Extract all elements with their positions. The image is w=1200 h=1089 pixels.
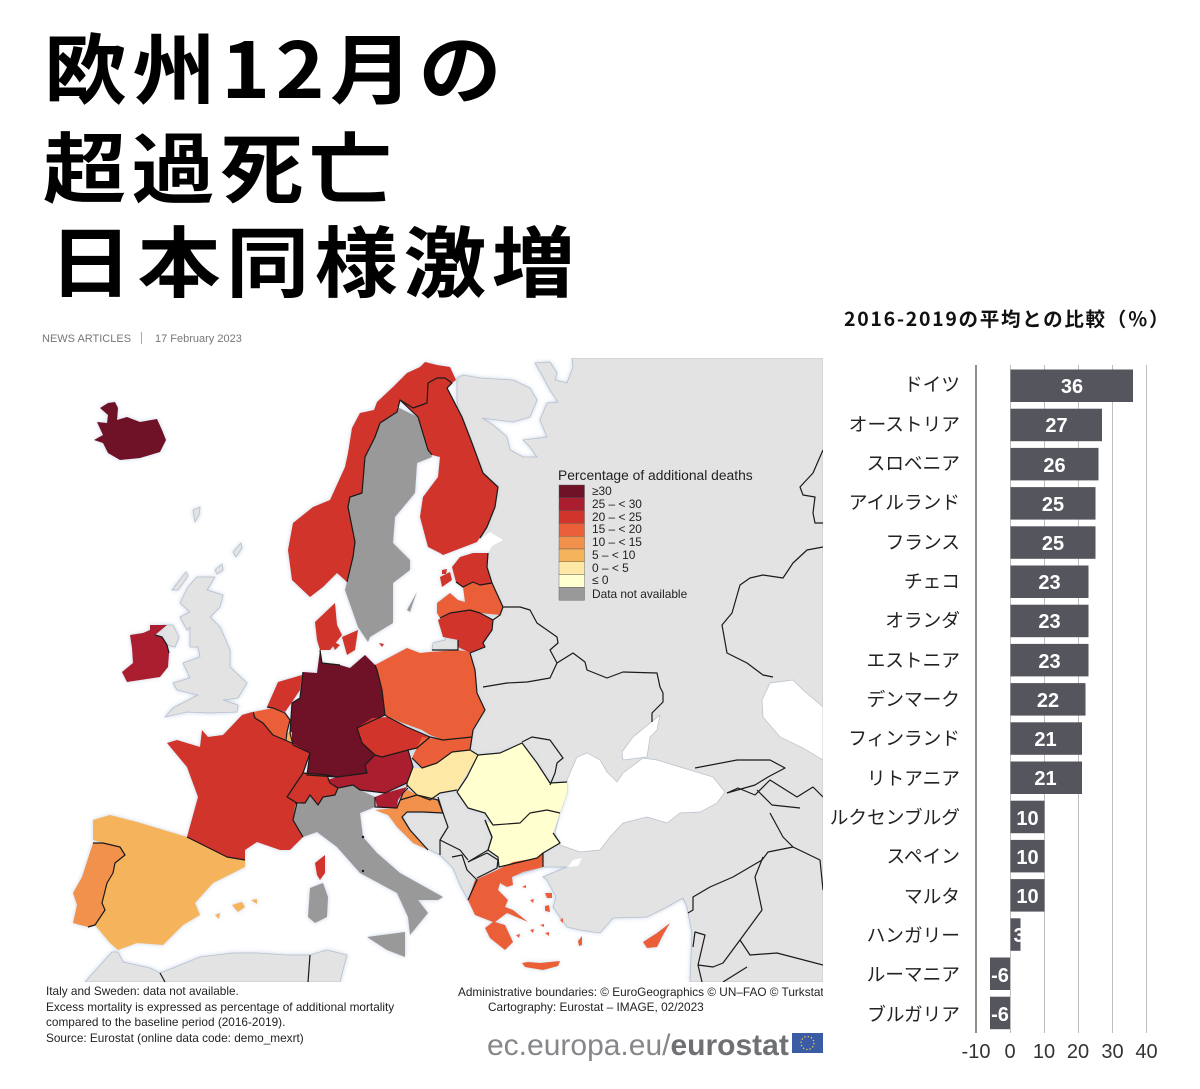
Balearic Islands xyxy=(215,899,257,919)
country labels: スロベニア xyxy=(867,449,960,476)
bar chart heading: 2016-2019の平均との比較（％） xyxy=(844,303,1170,332)
axis tick labels: 40 xyxy=(1135,1041,1158,1063)
country labels: オーストリア xyxy=(849,410,960,437)
Estonia xyxy=(440,553,492,587)
Gotland xyxy=(407,592,417,612)
map legend: ≥30 xyxy=(592,484,612,498)
map credits: Administrative boundaries: © EuroGeographics © UN–FAO © Turkstat xyxy=(458,985,824,999)
bar values: 10 xyxy=(1016,886,1039,908)
map legend: 15 – < 20 xyxy=(592,522,642,536)
Sweden xyxy=(345,407,432,642)
bar values: 23 xyxy=(1038,651,1061,673)
Sea of Azov xyxy=(622,715,660,760)
country labels: ハンガリー xyxy=(867,921,960,948)
bar values: 27 xyxy=(1045,415,1068,437)
France xyxy=(167,712,310,860)
Iceland xyxy=(94,402,166,460)
title: 欧州12月の xyxy=(44,10,507,121)
map: excess mortality in Europe xyxy=(73,358,823,982)
Germany xyxy=(290,650,385,777)
bar values: 10 xyxy=(1016,847,1039,869)
country labels: アイルランド xyxy=(849,488,960,515)
bar values: 26 xyxy=(1043,455,1066,477)
axis tick labels: 20 xyxy=(1067,1041,1089,1063)
country labels: マルタ xyxy=(904,882,960,909)
Finland xyxy=(400,378,498,555)
source notes: Italy and Sweden: data not available. xyxy=(46,984,239,998)
Poland xyxy=(375,648,485,740)
title: 超過死亡 xyxy=(43,109,397,220)
country labels: フランス xyxy=(886,528,960,555)
country labels: デンマーク xyxy=(867,685,960,712)
map credits: Cartography: Eurostat – IMAGE, 02/2023 xyxy=(488,1000,704,1014)
Lithuania xyxy=(438,610,493,653)
small gray islands xyxy=(172,507,242,590)
map legend: 0 – < 5 xyxy=(592,561,629,575)
map legend: 25 – < 30 xyxy=(592,497,642,511)
map legend xyxy=(558,467,753,601)
Croatia xyxy=(375,790,443,850)
Hungary xyxy=(407,750,478,800)
Northern Ireland xyxy=(155,625,179,647)
Netherlands xyxy=(267,675,302,712)
Ireland xyxy=(122,625,169,682)
Black Sea xyxy=(555,753,725,852)
Greece xyxy=(468,853,582,970)
axis tick labels: -10 xyxy=(962,1041,990,1063)
country labels: スペイン xyxy=(887,842,960,869)
Bulgaria xyxy=(485,810,560,867)
map credits xyxy=(458,985,824,1014)
country labels: ルーマニア xyxy=(867,960,960,987)
title: 日本同様激増 xyxy=(49,203,580,314)
Latvia xyxy=(437,582,503,618)
axis tick labels xyxy=(962,1041,1158,1063)
Slovakia xyxy=(412,737,472,768)
Cyprus xyxy=(643,923,670,948)
title xyxy=(43,10,580,314)
Caspian Sea xyxy=(762,680,823,760)
Norway xyxy=(288,362,456,597)
Denmark xyxy=(315,603,384,655)
bar values xyxy=(991,376,1083,1026)
seas xyxy=(440,532,823,867)
country labels: オランダ xyxy=(885,606,960,633)
bars xyxy=(990,370,1133,1029)
country labels: チェコ xyxy=(904,567,960,594)
North Africa xyxy=(85,950,347,982)
country labels: フィンランド xyxy=(848,724,960,751)
bar values: 10 xyxy=(1016,808,1039,830)
Portugal xyxy=(73,843,125,927)
non-reporting land: Russia, Balkans and Turkey xyxy=(395,358,823,982)
country labels xyxy=(830,370,960,1027)
bar values: 25 xyxy=(1042,533,1064,555)
eurostat logo: ec.europa.eu/eurostat xyxy=(487,1029,789,1062)
axis tick labels: 30 xyxy=(1101,1041,1124,1063)
news article date line: 17 February 2023 xyxy=(155,333,242,345)
Czechia xyxy=(357,717,430,757)
map legend: 5 – < 10 xyxy=(592,548,636,562)
axis tick labels: 0 xyxy=(1004,1041,1016,1063)
Switzerland xyxy=(287,773,338,805)
source notes: compared to the baseline period (2016-2019). xyxy=(46,1015,285,1029)
country labels: ルクセンブルグ xyxy=(830,803,960,830)
bar values: 25 xyxy=(1042,494,1064,516)
map legend: ≤ 0 xyxy=(592,573,609,587)
bar values: 23 xyxy=(1038,572,1061,594)
bar chart: comparison with 2016-2019 average xyxy=(830,365,1158,1063)
axis tick labels: 10 xyxy=(1033,1041,1055,1063)
bar values: -6 xyxy=(991,1004,1009,1026)
country labels: リトアニア xyxy=(867,764,960,791)
Slovenia xyxy=(375,787,407,808)
Corsica xyxy=(315,855,325,880)
bar values: 21 xyxy=(1034,768,1057,790)
Romania xyxy=(457,743,567,825)
news article date line xyxy=(42,332,242,345)
map legend: 20 – < 25 xyxy=(592,510,642,524)
bar values: 3 xyxy=(1013,925,1025,947)
source notes: Source: Eurostat (online data code: demo_mexrt) xyxy=(46,1031,304,1045)
map legend: Data not available xyxy=(592,587,688,601)
news article date line: NEWS ARTICLES xyxy=(42,333,131,345)
bar values: 21 xyxy=(1034,729,1057,751)
United Kingdom xyxy=(165,577,247,717)
bar values: 22 xyxy=(1037,690,1059,712)
bar values: -6 xyxy=(991,965,1009,987)
bar values: 23 xyxy=(1038,611,1061,633)
country labels: ドイツ xyxy=(904,370,960,397)
map legend: 10 – < 15 xyxy=(592,535,642,549)
country labels: ブルガリア xyxy=(867,1000,960,1027)
Austria xyxy=(327,750,413,793)
chart grid and axis xyxy=(976,365,1146,1033)
Italy xyxy=(293,785,443,957)
country borders xyxy=(88,378,823,982)
source notes: Excess mortality is expressed as percentage of additional mortality xyxy=(46,1000,394,1014)
Spain xyxy=(93,815,245,950)
Belgium xyxy=(253,708,290,740)
map legend: Percentage of additional deaths xyxy=(558,467,753,483)
Luxembourg xyxy=(286,732,292,742)
country labels: エストニア xyxy=(867,646,960,673)
bar values: 36 xyxy=(1061,376,1083,398)
source notes xyxy=(46,984,394,1045)
